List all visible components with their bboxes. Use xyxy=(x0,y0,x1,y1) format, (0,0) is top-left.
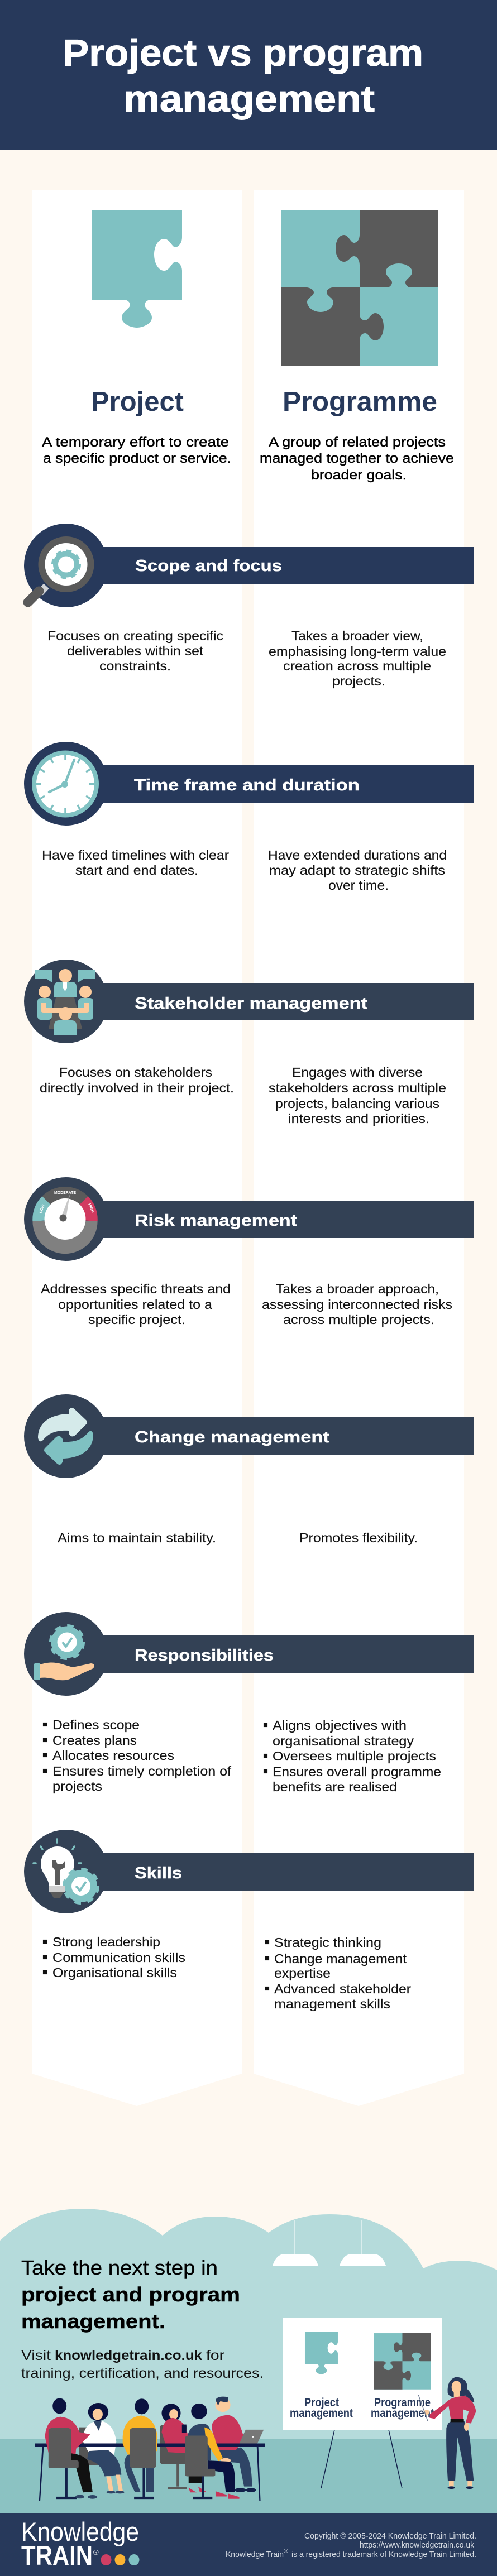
call-to-action heading: project and program xyxy=(21,2283,240,2306)
list: responsibilities, programme: organisational strategy xyxy=(273,1734,414,1748)
icon: single puzzle piece xyxy=(92,210,182,328)
text: project definition xyxy=(42,435,231,466)
table xyxy=(35,2443,265,2501)
icon: clock xyxy=(34,752,97,815)
person: back view, yellow sweater xyxy=(123,2398,157,2499)
list: responsibilities, project: projects xyxy=(52,1779,102,1793)
text: time, programme xyxy=(268,848,447,893)
presentation board: management xyxy=(371,2406,434,2420)
call-to-action text: training, certification, and resources. xyxy=(21,2366,264,2381)
text: project definition: a specific product or service. xyxy=(43,451,231,466)
call-to-action text: Visit xyxy=(21,2348,51,2363)
icon: magnifier with gear xyxy=(28,540,90,602)
section band: scope and focus: Scope and focus xyxy=(135,557,282,575)
header banner xyxy=(0,0,497,150)
copyright: Copyright © 2005-2024 Knowledge Train Limited. xyxy=(304,2531,476,2541)
text: risk, programme: Takes a broader approach, xyxy=(276,1282,439,1296)
text: risk, project xyxy=(41,1282,231,1327)
list: responsibilities, project xyxy=(43,1718,232,1793)
text: stakeholders, programme: interests and priorities. xyxy=(288,1111,429,1126)
person: back view, red sweater xyxy=(45,2398,97,2499)
presentation board: management xyxy=(290,2406,353,2420)
text: project definition: A temporary effort to create xyxy=(42,435,229,450)
person: woman in red xyxy=(160,2404,206,2492)
list: skills, programme: Advanced stakeholder xyxy=(274,1982,411,1996)
logo: ® xyxy=(93,2548,99,2556)
call-to-action heading: management. xyxy=(21,2310,165,2333)
presentation board: Project xyxy=(304,2396,339,2409)
list: skills, project: Organisational skills xyxy=(52,1965,177,1980)
text: risk, programme xyxy=(262,1282,452,1327)
ceiling lamps xyxy=(273,2220,386,2266)
text: time, project: start and end dates. xyxy=(75,863,198,877)
list: skills, programme: Change management xyxy=(274,1951,407,1966)
title: management xyxy=(123,78,375,120)
text: risk, project: opportunities related to a xyxy=(58,1297,212,1312)
list: responsibilities, project: Defines scope xyxy=(52,1718,140,1732)
text: scope, programme: creation across multiple xyxy=(283,659,431,673)
text: risk, project: Addresses specific threats and xyxy=(41,1282,231,1296)
panel: programme column xyxy=(254,190,464,2106)
text: time, programme: over time. xyxy=(328,878,389,893)
person: woman in white blouse xyxy=(79,2403,124,2493)
text: scope, project: constraints. xyxy=(99,659,171,673)
text: programme definition: A group of related projects xyxy=(269,435,446,450)
text: stakeholders, programme: projects, balancing various xyxy=(275,1096,439,1111)
presenter xyxy=(418,2377,476,2489)
call-to-action heading xyxy=(21,2256,240,2333)
list: responsibilities, programme xyxy=(264,1718,441,1794)
text: time, programme: Have extended durations and xyxy=(268,848,447,862)
list: skills, project: Communication skills xyxy=(52,1950,185,1965)
footer bar xyxy=(0,2513,497,2576)
heading: programme: Programme xyxy=(283,387,437,417)
list: skills, programme: Strategic thinking xyxy=(274,1935,381,1950)
text: change, project: Aims to maintain stability. xyxy=(58,1531,216,1545)
list: skills, project: Strong leadership xyxy=(52,1935,160,1949)
copyright: Knowledge Train xyxy=(226,2550,284,2559)
logo: TRAIN xyxy=(21,2541,93,2571)
icon: four puzzle pieces xyxy=(281,210,438,366)
call-to-action background: cloud wall xyxy=(0,2209,497,2513)
list: responsibilities, programme: Ensures overall programme xyxy=(273,1764,441,1779)
list: skills, programme xyxy=(265,1935,411,2011)
section band: responsibilities: Responsibilities xyxy=(135,1647,274,1664)
floor xyxy=(0,2439,497,2513)
copyright: is a registered trademark of Knowledge Train Limited. xyxy=(291,2550,476,2559)
text: risk, project: specific project. xyxy=(88,1312,185,1327)
list: responsibilities, project: Ensures timely completion of xyxy=(52,1764,232,1778)
copyright xyxy=(226,2531,476,2559)
text: stakeholders, programme: stakeholders across multiple xyxy=(269,1081,446,1095)
text: scope, project: Focuses on creating specific xyxy=(47,629,223,643)
list: responsibilities, project: Creates plans xyxy=(52,1733,137,1748)
meeting table with team xyxy=(35,2397,265,2501)
text: programme definition xyxy=(260,435,454,483)
text: scope, project xyxy=(47,629,223,673)
list: skills, project xyxy=(43,1935,185,1980)
copyright: https://www.knowledgetrain.co.uk xyxy=(360,2540,474,2550)
text: change, programme: Promotes flexibility. xyxy=(299,1531,418,1545)
section band: change management xyxy=(24,1394,474,1478)
list: responsibilities, programme: Oversees multiple projects xyxy=(273,1749,436,1763)
text: scope, programme xyxy=(269,629,446,688)
list: skills, programme: expertise xyxy=(274,1966,331,1980)
text: scope, programme: Takes a broader view, xyxy=(291,629,423,643)
section band: responsibilities xyxy=(24,1612,474,1696)
call-to-action text: knowledgetrain.co.uk xyxy=(55,2348,202,2363)
text: time, project: Have fixed timelines with clear xyxy=(42,848,229,862)
title xyxy=(63,32,423,120)
text: programme definition: managed together to achieve xyxy=(260,451,454,466)
panel: project column xyxy=(32,190,242,2106)
text: stakeholders, programme: Engages with diverse xyxy=(292,1065,423,1080)
list: responsibilities, project: Allocates resources xyxy=(52,1748,174,1763)
list: skills, programme: management skills xyxy=(274,1997,390,2011)
person: back view, navy vest xyxy=(185,2404,240,2499)
section band: time frame and duration xyxy=(24,742,474,826)
copyright: ® xyxy=(284,2548,288,2555)
icon: risk gauge: MODERATE xyxy=(54,1191,76,1195)
section band: change management: Change management xyxy=(135,1428,329,1446)
list: responsibilities, programme: Aligns objectives with xyxy=(273,1718,407,1733)
logo xyxy=(21,2517,140,2571)
section band: risk management xyxy=(24,1177,474,1261)
text: programme definition: broader goals. xyxy=(311,468,407,483)
section band: stakeholder management xyxy=(24,960,474,1043)
text: time, programme: may adapt to strategic shifts xyxy=(269,863,445,877)
section band: skills xyxy=(24,1830,474,1913)
text: stakeholders, project: directly involved in their project. xyxy=(40,1081,234,1095)
presentation board: Programme xyxy=(374,2396,431,2409)
call-to-action text: for xyxy=(206,2348,224,2363)
icon: risk gauge: LOW xyxy=(39,1204,46,1214)
text: scope, project: deliverables within set xyxy=(67,644,204,658)
icon: risk gauge xyxy=(32,1187,98,1254)
text: scope, programme: emphasising long-term value xyxy=(269,644,446,659)
icon: change arrows xyxy=(38,1408,93,1465)
logo: Knowledge xyxy=(21,2517,139,2546)
call-to-action heading: Take the next step in xyxy=(21,2256,218,2279)
section band: skills: Skills xyxy=(135,1864,182,1882)
section band: scope and focus xyxy=(24,524,474,607)
section band: risk management: Risk management xyxy=(135,1212,297,1230)
icon: risk gauge: HIGH xyxy=(87,1203,94,1213)
icon: stakeholders around a table xyxy=(35,969,95,1035)
text: risk, programme: across multiple projects. xyxy=(283,1312,434,1327)
text: risk, programme: assessing interconnected risks xyxy=(262,1297,452,1312)
title: Project vs program xyxy=(63,32,423,74)
text: scope, programme: projects. xyxy=(332,674,385,688)
presentation board xyxy=(283,2318,442,2488)
heading: project: Project xyxy=(91,387,184,417)
text: stakeholders, project xyxy=(40,1065,234,1095)
list: responsibilities, programme: benefits are realised xyxy=(273,1779,397,1794)
text: stakeholders, project: Focuses on stakeholders xyxy=(59,1065,212,1080)
person: smiling man with laptop xyxy=(212,2397,264,2492)
call-to-action text xyxy=(21,2348,264,2381)
section band: time frame and duration: Time frame and duration xyxy=(134,776,360,794)
text: stakeholders, programme xyxy=(269,1065,446,1126)
icon: gear on open hand xyxy=(34,1626,94,1680)
section band: stakeholder management: Stakeholder management xyxy=(135,995,367,1013)
text: time, project xyxy=(42,848,229,877)
icon: light bulb with wrench and gear xyxy=(34,1839,98,1903)
